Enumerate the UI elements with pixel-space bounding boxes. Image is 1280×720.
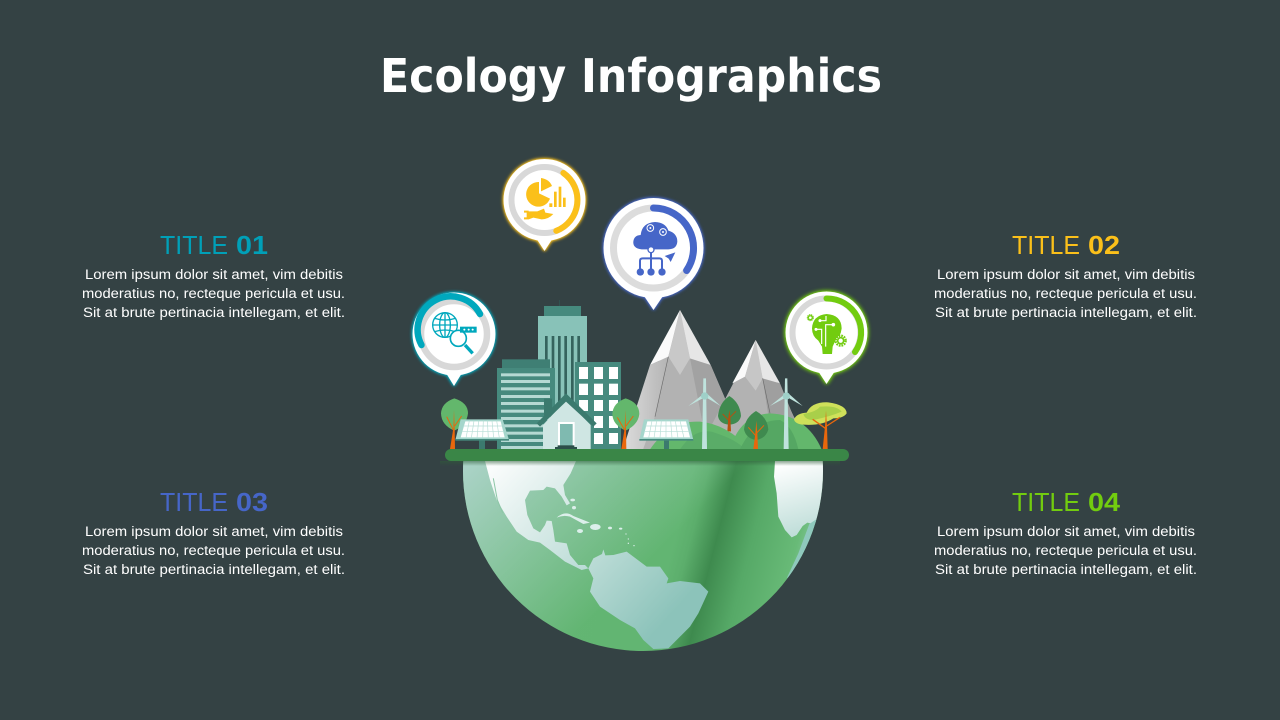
solar panel left [455, 419, 509, 449]
pin: title 03 blue [604, 198, 704, 310]
text block: title 01: Sit at brute pertinacia intellegam, et elit. [83, 305, 345, 320]
text block: title 02: moderatius no, recteque pericula et usu. [934, 286, 1197, 301]
icon: light bulb with circuits [808, 314, 846, 354]
text block: title 03: moderatius no, recteque pericula et usu. [82, 543, 345, 558]
text block: title 02: Sit at brute pertinacia intellegam, et elit. [935, 305, 1197, 320]
mountain: left [623, 310, 747, 449]
tree left [441, 398, 468, 449]
tree dark front [744, 411, 768, 449]
tree dark back [718, 396, 741, 431]
africa [774, 461, 825, 537]
text block: title 04 [934, 487, 1197, 577]
striped building [497, 359, 555, 449]
hills [650, 413, 822, 449]
ground platform [445, 449, 849, 461]
pin: title 01 teal [412, 292, 496, 386]
text block: title 01: moderatius no, recteque pericula et usu. [82, 286, 345, 301]
tower [538, 300, 587, 449]
icon: cloud network [633, 222, 677, 276]
text block: title 03: TITLE [160, 487, 228, 517]
text block: title 03 [82, 487, 345, 577]
text block: title 02: Lorem ipsum dolor sit amet, vim debitis [937, 267, 1195, 282]
text block: title 01: 01 [236, 230, 268, 260]
text block: title 01: TITLE [160, 230, 228, 260]
text block: title 02: 02 [1088, 230, 1120, 260]
caribbean islands [557, 499, 635, 546]
text block: title 02 [934, 230, 1197, 320]
window building [575, 362, 621, 449]
wind turbine left [688, 378, 721, 449]
city buildings [441, 300, 639, 449]
house [537, 393, 597, 449]
pin: title 02 yellow [504, 159, 586, 251]
text block: title 03: 03 [236, 487, 268, 517]
text block: title 01 [82, 230, 345, 320]
text block: title 04: moderatius no, recteque pericula et usu. [934, 543, 1197, 558]
north america [485, 461, 588, 570]
title: Ecology Infographics [380, 49, 882, 103]
text block: title 04: Sit at brute pertinacia intellegam, et elit. [935, 562, 1197, 577]
text block: title 03: Sit at brute pertinacia intellegam, et elit. [83, 562, 345, 577]
text block: title 02: TITLE [1012, 230, 1080, 260]
flat-top tree [794, 402, 847, 449]
wind turbine right [770, 378, 803, 449]
text block: title 04: 04 [1088, 487, 1121, 517]
text block: title 03: Lorem ipsum dolor sit amet, vim debitis [85, 524, 343, 539]
solar panel right [639, 419, 693, 449]
icon: pie chart and hand [524, 178, 566, 219]
text block: title 01: Lorem ipsum dolor sit amet, vim debitis [85, 267, 343, 282]
mountain: right [712, 340, 810, 449]
text block: title 04: Lorem ipsum dolor sit amet, vim debitis [937, 524, 1195, 539]
green hills, turbines and trees [639, 378, 847, 449]
text block: title 04: TITLE [1012, 487, 1080, 517]
globe [440, 461, 840, 651]
pin: title 04 green [786, 292, 868, 384]
south america [588, 549, 708, 649]
icon: globe and magnifier [433, 313, 477, 353]
tree middle [612, 398, 639, 449]
mountains [623, 310, 810, 449]
